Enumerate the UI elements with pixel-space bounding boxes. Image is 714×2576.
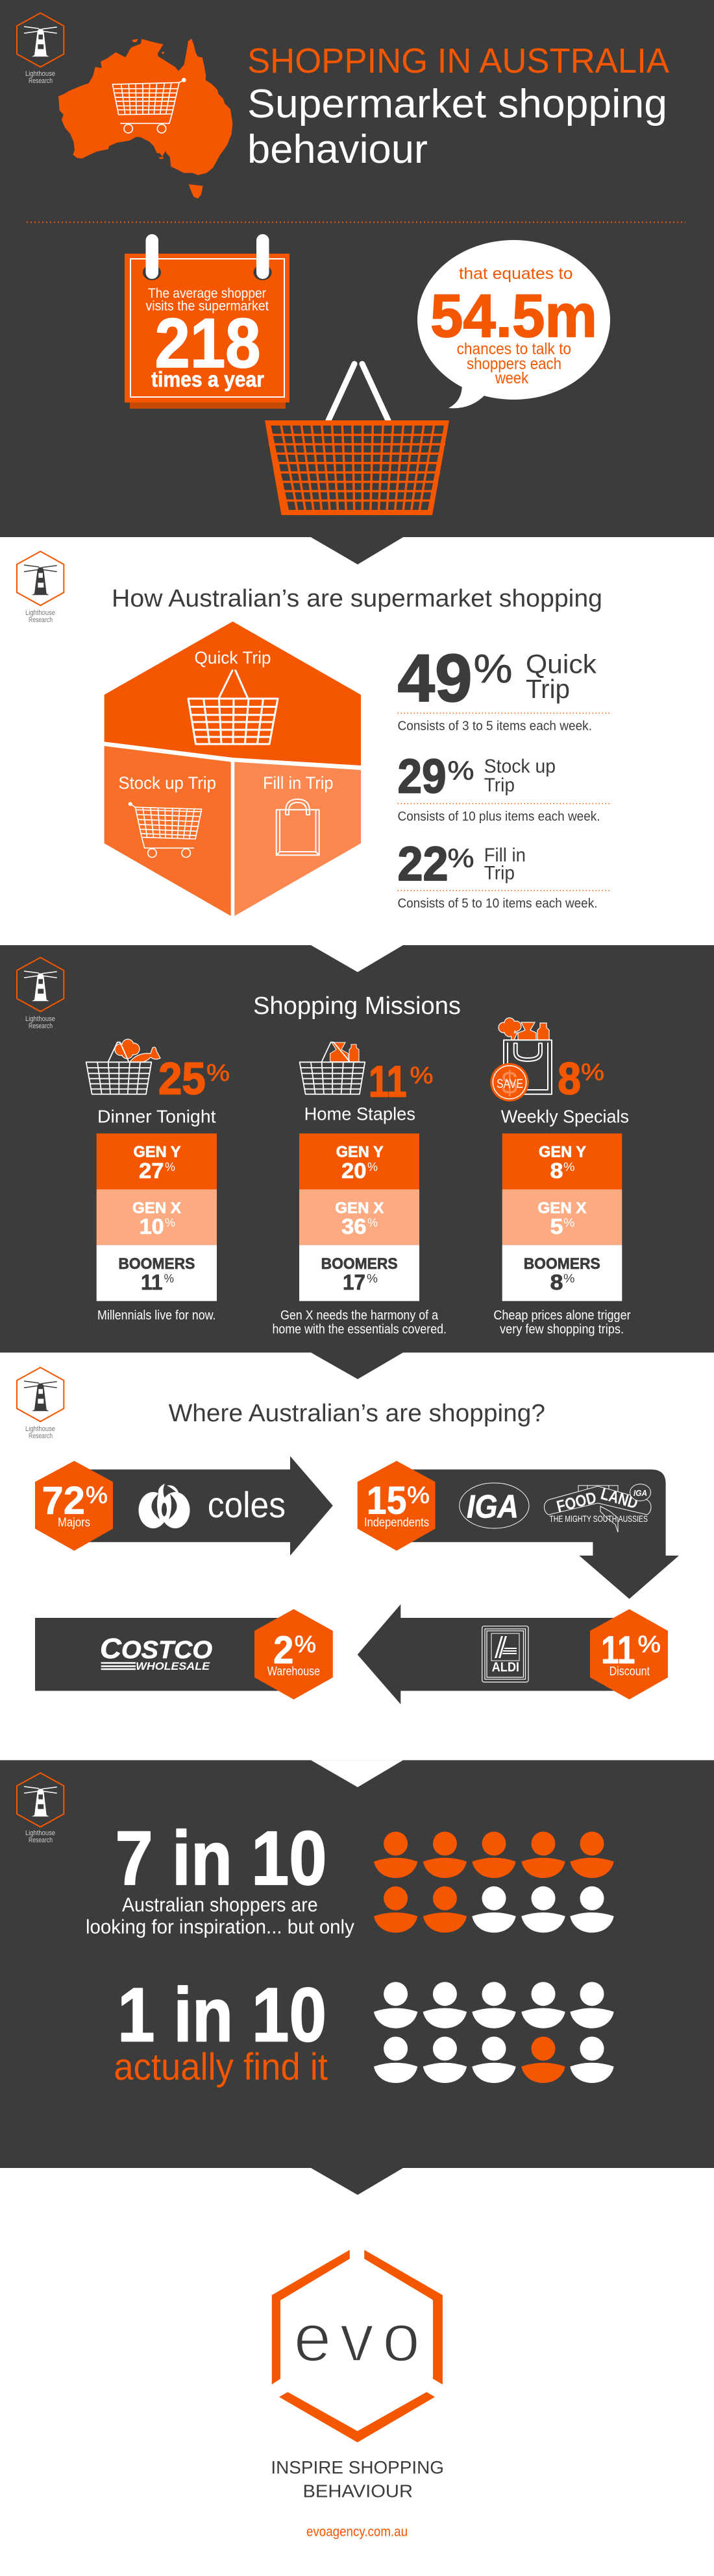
badge: 15% independents: Independents [364,1516,429,1530]
table: generations: GEN Y [539,1144,586,1161]
caption [273,1308,447,1336]
icon: calendar with 218 times a year: 218 [154,304,261,382]
icon: calendar with 218 times a year: The average shopper [148,286,266,301]
stat: 1 in 10: 1 in 10 [117,1972,326,2058]
table: generations [299,1133,419,1301]
chart: people 1 of 10 highlighted [374,1982,614,2083]
icon: basket with broccoli and fish [86,1039,160,1094]
table: generations: % [367,1272,378,1285]
stat: 22% fill in trip: % [448,843,474,873]
column: home staples [273,1042,447,1336]
badge: 11% discount: 11 [601,1628,635,1672]
logo: IGA: IGA [467,1488,519,1524]
subtitle: Supermarket shopping: Supermarket shopping [247,82,667,126]
table: generations: % [164,1272,174,1285]
stat: 8% [558,1053,604,1104]
table: generations: GEN X [132,1199,181,1217]
icon: lighthouse research badge [17,1367,64,1440]
badge: 2% warehouse: Warehouse [267,1665,320,1679]
stat: 29% stock up trip: Trip [484,775,515,796]
table: generations: 8 [550,1270,563,1294]
logo: evo hexagon: evo [293,2301,420,2376]
stat: 8%: % [581,1059,604,1085]
callout: speech bubble 54.5m: 54.5m [430,282,597,350]
logo: Foodland: IGA [634,1488,647,1498]
table: generations: 36 [341,1214,366,1238]
icon: basket with bread and bottle [300,1042,365,1094]
caption: home with the essentials covered. [273,1322,447,1336]
table: generations: GEN Y [336,1144,384,1161]
stat: 29% stock up trip: % [448,756,474,786]
callout: speech bubble 54.5m: chances to talk to [457,340,571,358]
stat: 22% fill in trip: Fill in [484,845,526,866]
logo: Costco Wholesale: WHOLESALE [136,1660,210,1672]
badge: 15% independents: % [407,1482,430,1508]
table: generations [97,1133,217,1301]
stat: 29% stock up trip [397,749,611,824]
segment: quick trip [105,621,361,765]
icon: calendar with 218 times a year: visits the supermarket [145,299,269,314]
table: generations: 8 [550,1159,563,1183]
caption: Millennials live for now. [97,1308,215,1323]
logo: coles: coles [208,1484,286,1525]
chart: hexagon trip share [105,621,361,916]
stat: 22% fill in trip [397,837,611,911]
panel: inspiration [0,1760,714,2195]
map: Australia with shopping cart [58,38,232,199]
badge: 72% majors: 72 [42,1479,85,1523]
logo: IGA [460,1483,529,1528]
table: generations: % [367,1216,378,1229]
column: dinner tonight [86,1039,230,1323]
heading: How Australian’s are supermarket shopping [112,585,602,612]
table: generations: 17 [343,1270,365,1294]
stat: 7 in 10: 7 in 10 [116,1816,327,1901]
logo: Foodland: THE MIGHTY SOUTH AUSSIES [549,1513,648,1524]
stat: 49% quick trip: % [474,647,513,692]
table: generations: 5 [550,1214,563,1238]
caption [493,1308,631,1336]
heading: Where Australian’s are shopping? [169,1400,545,1427]
badge: 2% warehouse: % [295,1631,316,1657]
table: generations: BOOMERS [321,1255,398,1273]
callout: speech bubble 54.5m: shoppers each [467,355,561,373]
panel: how Australians are supermarket shopping [17,537,611,916]
stat: 49% quick trip [397,641,611,733]
badge: 15% independents [358,1461,436,1550]
website: evoagency.com.au [306,2525,408,2540]
arrow: warehouse [35,1609,333,1700]
stat: 11%: 11 [369,1057,406,1107]
table: generations [502,1133,622,1301]
arrow: independents [358,1461,679,1599]
table: generations: % [563,1216,575,1229]
table: generations: % [165,1216,175,1229]
badge: 72% majors: Majors [58,1516,90,1530]
icon: lighthouse research badge: Lighthouse [25,609,55,617]
title: Shopping in Australia: SHOPPING IN AUSTRALIA [247,42,669,80]
icon: lighthouse research badge: Research [29,616,53,624]
badge: 11% discount: % [637,1631,661,1657]
tagline: INSPIRE SHOPPING [271,2457,444,2477]
text: Australian shoppers: Australian shoppers are [122,1893,318,1916]
stat: 8%: 8 [558,1053,581,1104]
icon: lighthouse research badge: Lighthouse [25,1829,55,1837]
icon: lighthouse research badge [17,551,64,624]
stat: 22% fill in trip: Consists of 5 to 10 items each week. [397,897,597,911]
table: generations: % [367,1161,378,1174]
segment: stock up trip: Stock up Trip [118,773,216,793]
stat: 25%: 25 [158,1053,206,1104]
caption: very few shopping trips. [500,1322,624,1336]
caption: Cheap prices alone trigger [493,1308,631,1323]
heading: Shopping Missions [253,993,461,1020]
column: weekly specials [490,1018,631,1336]
logo: woolworths [139,1484,190,1528]
icon: shopping bag with groceries and save coin: $ [501,1065,518,1101]
arrow: discount [358,1604,668,1704]
badge: 11% discount [590,1609,668,1700]
icon: lighthouse research badge: Research [29,77,53,85]
icon: lighthouse research badge [17,1773,64,1844]
label: Dinner Tonight [97,1107,216,1127]
logo: ALDI: ALDI [492,1661,519,1675]
table: generations: GEN Y [134,1144,180,1161]
table: generations: 11 [141,1270,162,1294]
table: generations: % [165,1161,175,1174]
stat: 49% quick trip: Quick [526,649,597,679]
table: generations: % [563,1161,575,1174]
logo: Foodland [544,1484,651,1532]
logo: Foodland: FOOD [555,1489,598,1516]
icon: lighthouse research badge [17,13,64,85]
icon: lighthouse research badge: Research [29,1836,53,1844]
table: generations: GEN X [537,1199,587,1217]
icon: lighthouse research badge: Lighthouse [25,70,55,78]
stat: 25%: % [206,1059,230,1086]
text: Australian shoppers [86,1893,354,1938]
panel: where Australians are shopping [17,1353,679,1704]
badge: 72% majors: % [86,1482,108,1508]
callout: speech bubble 54.5m [417,240,610,408]
stat: 49% quick trip: 49 [397,641,473,716]
stat: 29% stock up trip: Stock up [484,756,556,777]
panel: header section [0,0,714,564]
segment: quick trip: Quick Trip [195,648,271,668]
icon: calendar with 218 times a year: times a year [151,367,264,391]
icon: lighthouse research badge: Research [29,1432,53,1440]
table: generations: % [563,1272,575,1285]
chart: people 7 of 10 highlighted [374,1832,614,1932]
segment: stock up trip [105,746,231,916]
text: Australian shoppers: looking for inspiration... but only [86,1915,354,1938]
caption: Gen X needs the harmony of a [280,1308,439,1323]
icon: large shopping basket [265,364,449,515]
logo: evo hexagon [272,2250,443,2442]
table: generations: 20 [341,1159,366,1183]
table: generations: BOOMERS [118,1255,195,1273]
table: generations: BOOMERS [524,1255,600,1273]
stat: 22% fill in trip: Trip [484,863,515,884]
table: generations: 10 [140,1214,164,1238]
icon: calendar with 218 times a year [125,234,289,409]
label: Home Staples [304,1104,415,1124]
badge: 11% discount: Discount [609,1665,650,1679]
stat: 22% fill in trip: 22 [397,837,448,891]
tagline: BEHAVIOUR [302,2481,413,2501]
icon: lighthouse research badge: Lighthouse [25,1425,55,1433]
text: actually find it: actually find it [114,2046,328,2088]
icon: shopping bag with groceries and save coin: SAVE [497,1077,523,1091]
badge: 15% independents: 15 [367,1479,406,1523]
stat: 49% quick trip: Consists of 3 to 5 items each week. [397,719,592,733]
icon: lighthouse research badge: Lighthouse [25,1015,55,1023]
segment: fill in trip [234,762,361,916]
callout: speech bubble 54.5m: that equates to [459,265,572,283]
subtitle: behaviour: behaviour [247,127,428,172]
badge: 72% majors [35,1461,113,1550]
callout: speech bubble 54.5m: week [495,369,528,387]
logo: Foodland: LAND [598,1485,640,1513]
logo: ALDI [482,1626,528,1682]
panel: footer brand [271,2250,444,2540]
segment: fill in trip: Fill in Trip [263,773,334,793]
panel: shopping missions [0,945,714,1353]
tagline [271,2457,444,2501]
label: Weekly Specials [501,1107,629,1127]
logo: Costco Wholesale: COSTCO [100,1633,212,1665]
table: generations: 27 [139,1159,164,1183]
stat: 29% stock up trip: 29 [397,749,447,803]
stat: 49% quick trip: Trip [526,674,570,704]
stat: 11%: % [410,1062,434,1089]
table: generations: GEN X [335,1199,384,1217]
icon: lighthouse research badge: Research [29,1022,53,1030]
icon: shopping bag with groceries and save coin [490,1018,552,1101]
arrow: majors [35,1456,333,1556]
badge: 2% warehouse [254,1609,333,1700]
icon: lighthouse research badge [17,957,64,1030]
stat: 29% stock up trip: Consists of 10 plus items each week. [397,810,600,824]
badge: 2% warehouse: 2 [273,1628,293,1672]
